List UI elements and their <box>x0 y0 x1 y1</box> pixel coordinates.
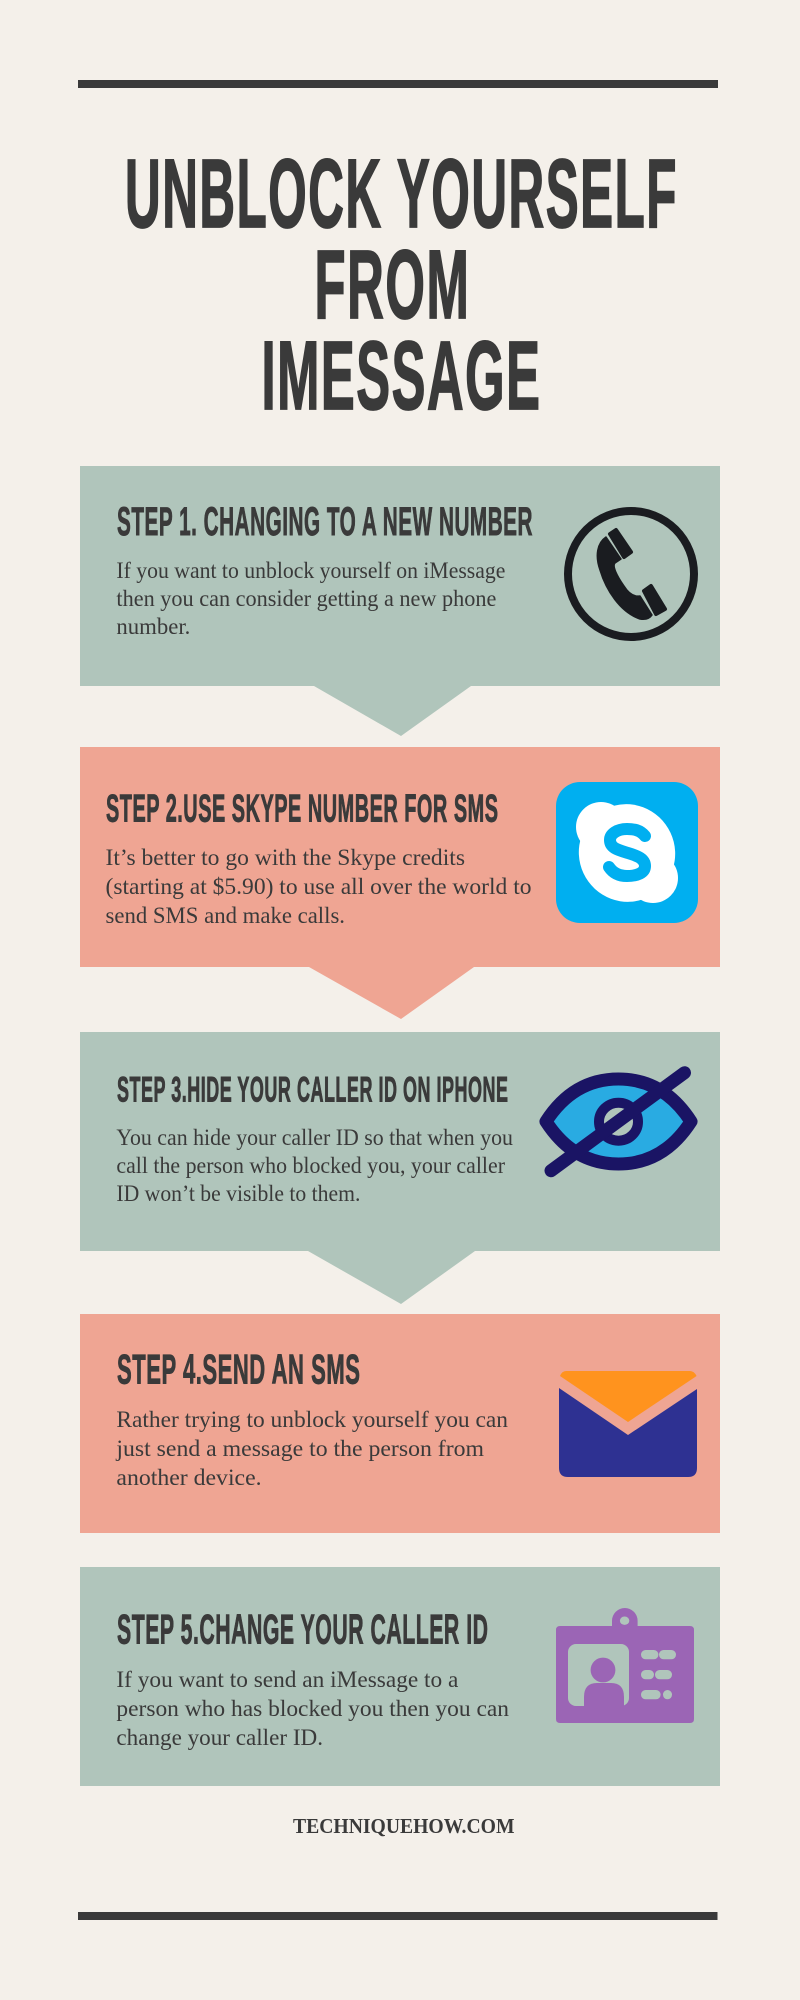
panel: step 3 <box>80 1032 720 1304</box>
panel: step 4 <box>80 1314 720 1533</box>
step 2 body text: It’s better to go with the Skype credits <box>106 845 465 870</box>
icon: skype <box>556 782 698 923</box>
step 1 body text: then you can consider getting a new phone <box>116 586 496 611</box>
panel 1 background with arrow <box>80 466 720 736</box>
panel: step 2 <box>80 747 720 1019</box>
top rule <box>78 80 718 88</box>
title: IMESSAGE <box>262 321 542 430</box>
step 5 body text: If you want to send an iMessage to a <box>116 1667 458 1692</box>
icon: crossed-out eye <box>546 1073 691 1171</box>
step 3 body text: ID won’t be visible to them. <box>116 1181 360 1206</box>
title <box>125 139 678 430</box>
step 4 body text: Rather trying to unblock yourself you can <box>116 1407 508 1432</box>
panel 2 background with arrow <box>80 747 720 1019</box>
panel 5 background <box>80 1567 720 1786</box>
title: FROM <box>314 230 470 339</box>
icon: telephone <box>568 511 694 637</box>
step 1 body text: number. <box>116 614 190 639</box>
step 2 body text: send SMS and make calls. <box>106 903 345 928</box>
step 4 body text: another device. <box>116 1465 262 1490</box>
step 5 body text: person who has blocked you then you can <box>116 1696 509 1721</box>
step 3 body text: call the person who blocked you, your caller <box>116 1153 505 1178</box>
step 5 body text <box>116 1667 509 1750</box>
icon: envelope <box>559 1371 697 1477</box>
step 4 body text: just send a message to the person from <box>115 1436 484 1461</box>
step 5 body text: change your caller ID. <box>116 1725 323 1750</box>
step 1 body text: If you want to unblock yourself on iMessage <box>116 558 505 583</box>
icon: ID badge <box>556 1608 694 1723</box>
step 3 body text <box>116 1125 513 1206</box>
panel: step 1 <box>80 466 720 736</box>
panel 3 background with arrow <box>80 1032 720 1304</box>
step 2 body text: (starting at $5.90) to use all over the world to <box>106 874 532 899</box>
bottom rule <box>78 1912 718 1920</box>
step 2 body text <box>106 845 532 928</box>
step 1 body text <box>116 558 505 639</box>
footer source text: TECHNIQUEHOW.COM <box>293 1814 515 1838</box>
panel 4 background <box>80 1314 720 1533</box>
step 4 body text <box>115 1407 508 1490</box>
panel: step 5 <box>80 1567 720 1786</box>
step 3 body text: You can hide your caller ID so that when you <box>116 1125 513 1150</box>
step 4 heading: STEP 4.SEND AN SMS <box>117 1346 360 1392</box>
